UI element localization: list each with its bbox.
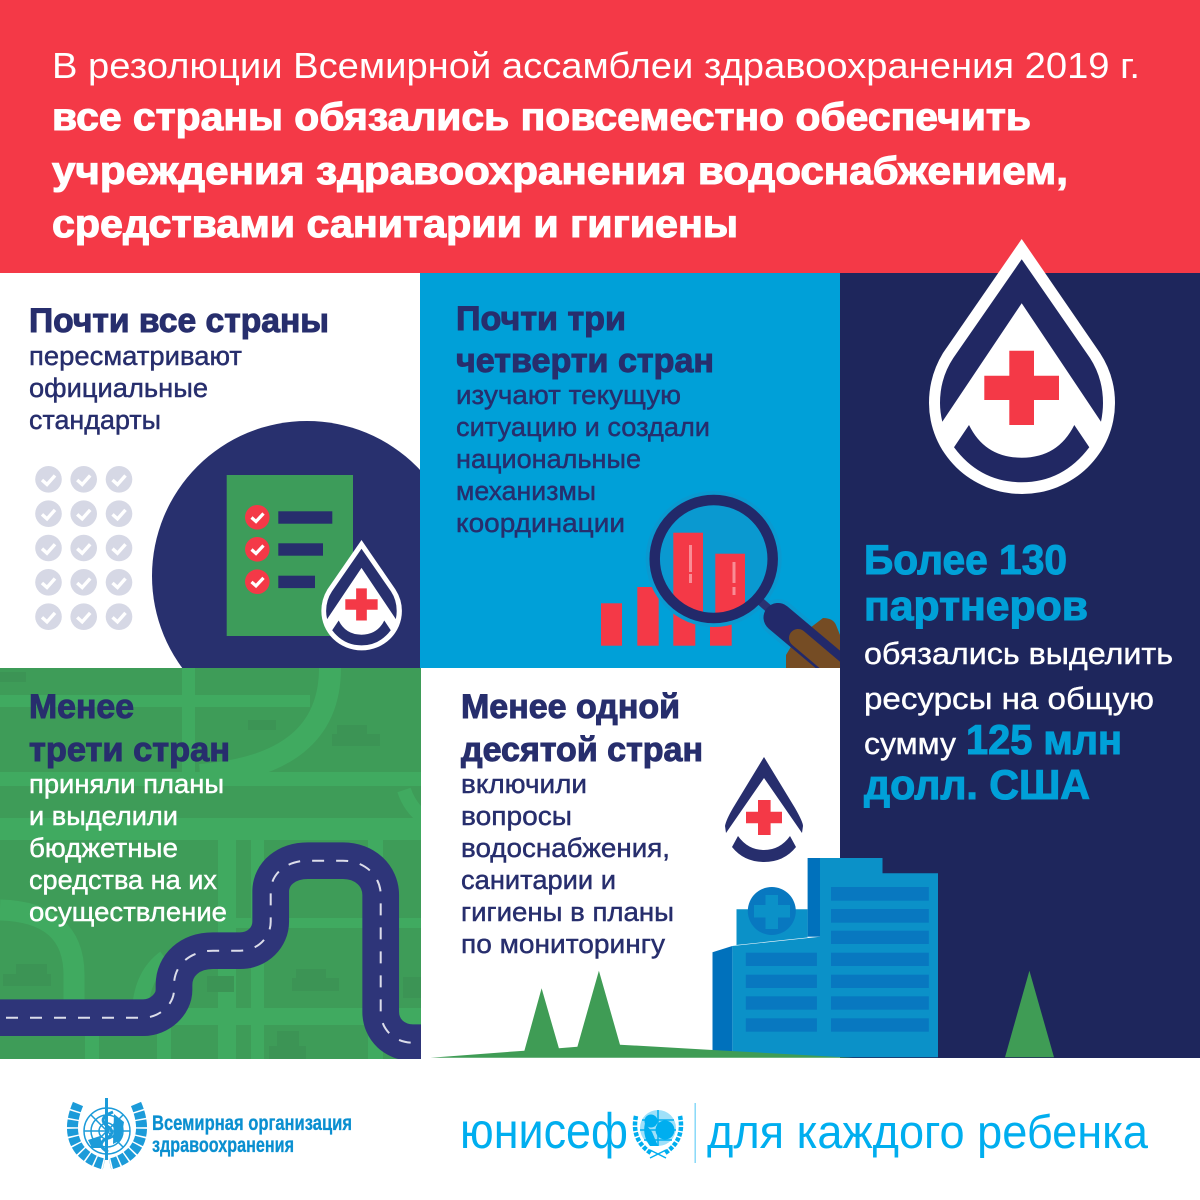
panel 5 body text: обязались выделить — [864, 636, 1173, 671]
UNICEF emblem — [635, 1110, 681, 1158]
panel 3 body text: и выделили — [29, 801, 178, 831]
panel 5 partners heading — [864, 536, 1088, 629]
panel 2 body text: изучают текущую — [456, 380, 681, 410]
panel 4 heading: десятой стран — [461, 731, 703, 769]
panel 3 body text: приняли планы — [29, 769, 224, 799]
header bold statement: все страны обязались повсеместно обеспечить — [52, 96, 1031, 139]
UNICEF tagline: для каждого ребенка — [707, 1105, 1149, 1158]
panel 1 body text: пересматривают — [29, 341, 242, 371]
panel 3 heading: трети стран — [29, 731, 230, 769]
icon: navy water drop with cross — [725, 757, 803, 862]
panel: almost all countries — [30, 308, 420, 668]
panel 1 body text: официальные — [29, 373, 208, 403]
panel 5 partners heading: Более 130 — [864, 536, 1067, 583]
WHO name text: здравоохранения — [152, 1134, 294, 1157]
panel: less than a third of countries — [0, 668, 425, 1060]
panel 3 body text — [29, 769, 227, 927]
navy circle backdrop — [152, 421, 420, 668]
panel 1 body text: стандарты — [29, 405, 161, 435]
WHO name text — [152, 1112, 352, 1157]
panel: less than a tenth of countries — [421, 668, 840, 1058]
panel 3 body text: осуществление — [29, 897, 227, 927]
panel 4 body text: вопросы — [461, 801, 572, 831]
header bold statement: средствами санитарии и гигиены — [52, 203, 738, 246]
city map background — [0, 668, 424, 1060]
icon: tree on navy — [1005, 971, 1054, 1057]
panel 3 heading: Менее — [29, 688, 134, 726]
header bold statement: учреждения здравоохранения водоснабжением, — [52, 150, 1068, 193]
UNICEF wordmark: юнисеф — [460, 1103, 628, 1159]
icon: hospital building — [712, 858, 938, 1057]
panel 2 body text — [456, 380, 710, 538]
panel 4 body text: водоснабжения, — [461, 833, 670, 863]
panel 2 body text: механизмы — [456, 476, 596, 506]
panel 4 body text — [461, 769, 674, 959]
icon: magnifying glass with hand — [646, 491, 840, 668]
panel 3 heading — [29, 688, 230, 769]
panel 4 heading — [461, 688, 703, 769]
panel 5 amount: долл. США — [864, 761, 1090, 808]
logo: UNICEF — [460, 1103, 1149, 1163]
panel 2 body text: ситуацию и создали — [456, 412, 710, 442]
bar chart under magnifier — [601, 587, 732, 646]
WHO name text: Всемирная организация — [152, 1112, 352, 1135]
hospital round sign — [748, 887, 796, 935]
UNICEF divider — [694, 1103, 696, 1163]
icon: winding road — [0, 861, 425, 1043]
panel 3 body text: бюджетные — [29, 833, 178, 863]
panel 4 body text: включили — [461, 769, 587, 799]
panel 5 body text — [864, 636, 1173, 761]
panel 2 heading: четверти стран — [456, 342, 714, 380]
header bold statement — [52, 96, 1068, 246]
header intro line: В резолюции Всемирной ассамблеи здравоохранения 2019 г. — [52, 45, 1140, 86]
panel: navy partners column — [840, 273, 1200, 1058]
panel: nearly three quarters of countries — [420, 273, 850, 682]
panel 4 body text: гигиены в планы — [461, 897, 674, 927]
panel: header banner — [0, 0, 1200, 273]
panel 1 body text — [29, 341, 242, 435]
panel 1 heading: Почти все страны — [29, 302, 329, 340]
panel 2 body text: национальные — [456, 444, 641, 474]
panel 2 body text: координации — [456, 508, 625, 538]
panel 4 body text: по мониторингу — [461, 929, 666, 959]
panel 5 amount: 125 млн — [966, 716, 1122, 763]
panel 4 heading: Менее одной — [461, 688, 680, 726]
panel 5 body text: сумму — [864, 726, 957, 761]
icon: trees and ground — [430, 971, 853, 1058]
WHO emblem — [72, 1098, 142, 1164]
icon: large water drop with cross — [929, 239, 1115, 494]
icon: green checklist document — [227, 475, 353, 636]
panel 5 partners heading: партнеров — [864, 582, 1088, 629]
panel 2 heading: Почти три — [456, 300, 626, 338]
icon: small water drop with cross — [321, 540, 402, 650]
panel 4 body text: санитарии и — [461, 865, 616, 895]
panel 2 heading — [456, 300, 714, 380]
panel 3 body text: средства на их — [29, 865, 217, 895]
logo: WHO — [72, 1098, 352, 1164]
panel 5 amount — [864, 716, 1122, 808]
panel 5 body text: ресурсы на общую — [864, 681, 1154, 716]
icon: grid of grey checkmarks — [35, 466, 132, 630]
